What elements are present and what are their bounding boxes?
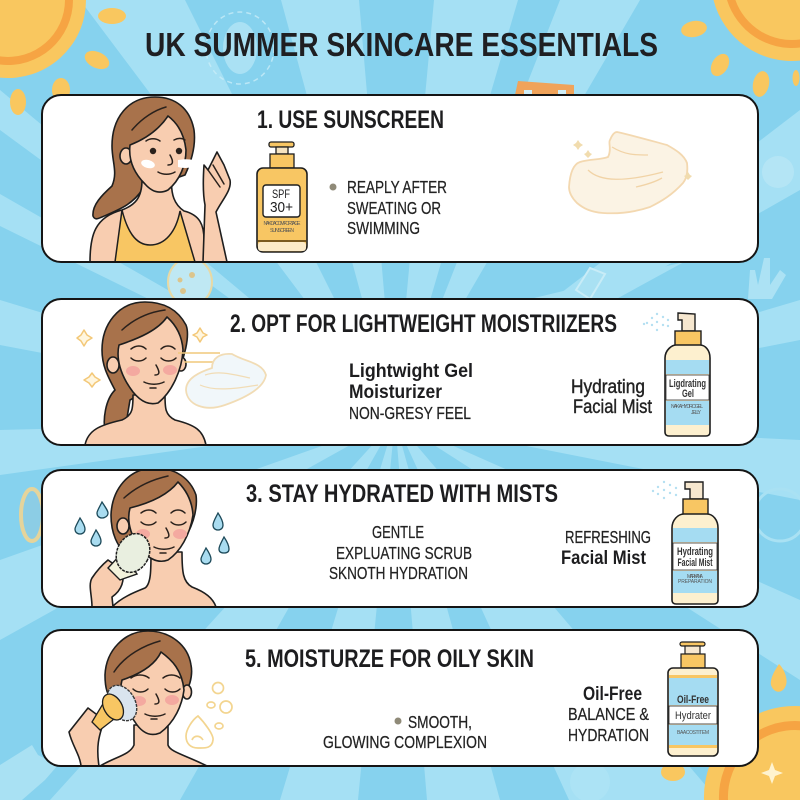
complexion bullet text: SMOOTH, bbox=[408, 712, 472, 732]
gel bottle: NAKA HYDROGEL bbox=[671, 404, 703, 410]
mist text: Hydrating bbox=[571, 377, 645, 398]
sun: bottom right bbox=[661, 664, 800, 800]
reapply bullet text: REAPLY AFTER bbox=[347, 177, 447, 197]
gel swatch bbox=[178, 353, 266, 408]
gel bottle: Gel bbox=[682, 388, 694, 400]
sunscreen bottle bbox=[257, 142, 307, 252]
title: UK SUMMER SKINCARE ESSENTIALS bbox=[145, 26, 658, 63]
gel text: Moisturizer bbox=[349, 381, 442, 403]
balance text: HYDRATION bbox=[568, 725, 649, 745]
mist text bbox=[571, 377, 653, 418]
panel 3: hydrate with mists bbox=[42, 468, 758, 607]
balance text bbox=[568, 683, 649, 745]
panel 4: moisturize for oily skin bbox=[42, 630, 758, 766]
gel bottle: Ligdrating bbox=[669, 378, 706, 390]
heading: 1. USE SUNSCREEN bbox=[257, 106, 444, 134]
woman using facial brush bbox=[90, 468, 216, 607]
mist text: Facial Mist bbox=[573, 397, 653, 418]
panel 2: lightweight moisturizers bbox=[42, 299, 758, 445]
scrub text: EXPLUATING SCRUB bbox=[336, 543, 472, 563]
panel 2 border bbox=[42, 299, 758, 445]
gel bottle bbox=[665, 313, 710, 436]
oil-free bottle: Oil-Free bbox=[677, 694, 709, 706]
reapply bullet text: SWIMMING bbox=[347, 218, 420, 238]
mist bottle: Facial Mist bbox=[678, 557, 713, 569]
oil-free bottle: Hydrater bbox=[675, 710, 711, 722]
sunscreen cream swatch bbox=[569, 132, 692, 213]
avocado and oil icons bbox=[186, 682, 232, 748]
panel 3 border bbox=[42, 470, 758, 607]
sunscreen bottle: SPF bbox=[272, 187, 290, 201]
gel bottle: JELLY bbox=[691, 410, 702, 416]
complexion bullet text bbox=[323, 712, 487, 752]
sun: top left bbox=[0, 0, 126, 115]
gel text bbox=[349, 360, 473, 423]
balance text: Oil-Free bbox=[583, 683, 642, 705]
heading: 2. OPT FOR LIGHTWEIGHT MOISTRIIZERS bbox=[230, 310, 617, 338]
reapply bullet text bbox=[330, 177, 447, 238]
sunscreen bottle: 30+ bbox=[270, 199, 293, 216]
mist bottle: PREPARATION bbox=[678, 579, 712, 585]
complexion bullet text: GLOWING COMPLEXION bbox=[323, 732, 487, 752]
oil-free bottle bbox=[668, 642, 718, 756]
heading: 5. MOISTURZE FOR OILY SKIN bbox=[245, 645, 534, 673]
gel text: Lightwight Gel bbox=[349, 360, 473, 382]
mist text: Facial Mist bbox=[561, 547, 646, 569]
woman applying sunscreen bbox=[90, 97, 230, 262]
sunscreen bottle: SUNSCREEN bbox=[270, 228, 294, 234]
balance text: BALANCE & bbox=[568, 704, 649, 724]
sun: top right bbox=[680, 0, 800, 98]
woman with cleansing brush bbox=[69, 631, 207, 766]
gel text: NON-GRESY FEEL bbox=[349, 403, 471, 423]
oil-free bottle: BAACOSTITEM bbox=[677, 730, 709, 736]
mist bottle: Hydrating bbox=[677, 546, 713, 558]
panel 4 border bbox=[42, 630, 758, 766]
heading: 3. STAY HYDRATED WITH MISTS bbox=[246, 480, 558, 508]
mist text bbox=[561, 527, 651, 569]
mist bottle: MARKANA bbox=[687, 574, 704, 580]
spray dots bbox=[652, 481, 677, 499]
scrub text bbox=[329, 522, 472, 583]
spray dots bbox=[643, 313, 669, 331]
scrub text: SKNOTH HYDRATION bbox=[329, 563, 468, 583]
panel 1 border bbox=[42, 95, 758, 262]
woman with sparkling skin bbox=[85, 302, 206, 445]
water drops bbox=[75, 502, 229, 564]
panel 1: use sunscreen bbox=[42, 95, 758, 262]
sparkles bbox=[77, 328, 207, 387]
sunscreen bottle: NAKDA COMFORTAGE bbox=[264, 221, 301, 227]
reapply bullet text: SWEATING OR bbox=[347, 198, 441, 218]
mist text: REFRESHING bbox=[565, 527, 651, 547]
mist bottle bbox=[672, 482, 718, 604]
scrub text: GENTLE bbox=[372, 522, 424, 542]
